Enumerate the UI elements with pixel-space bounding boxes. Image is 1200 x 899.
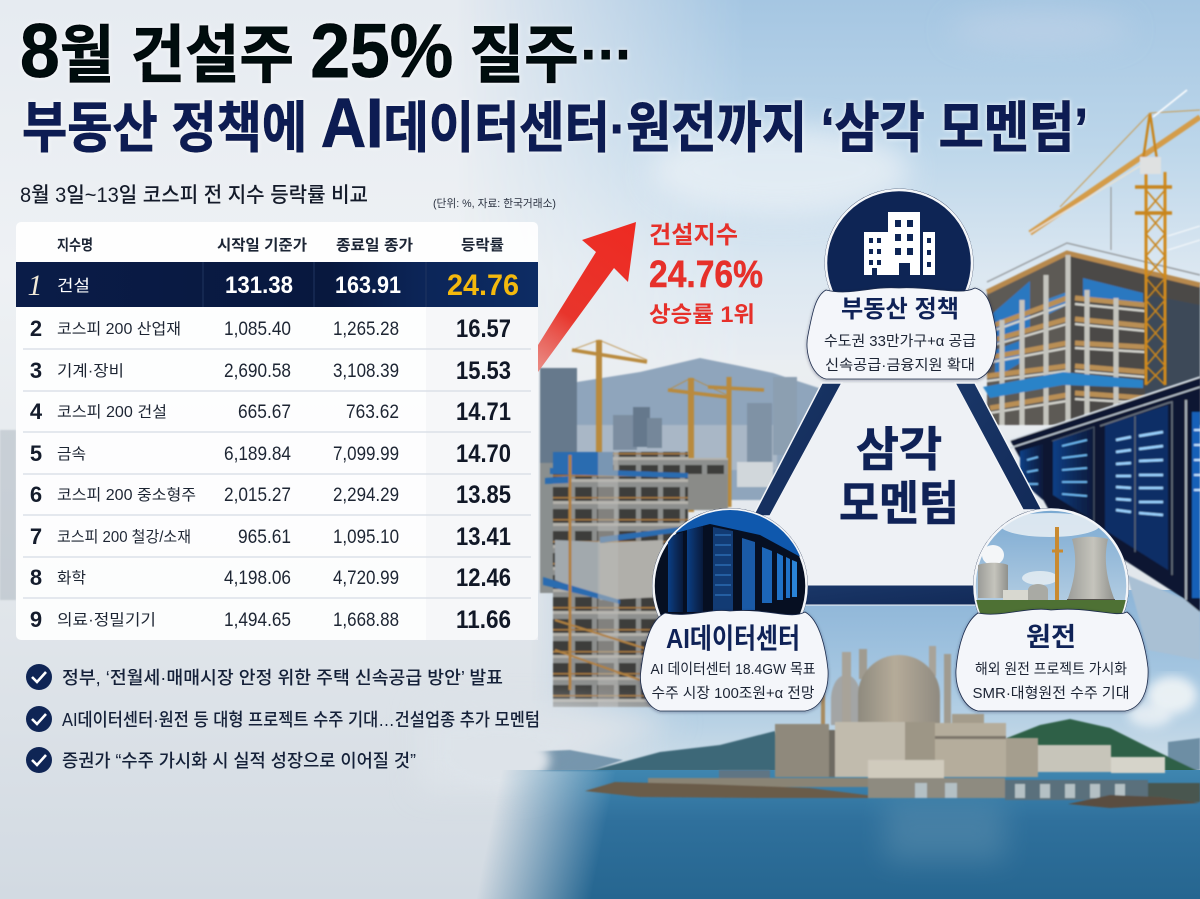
callout: construction index: 건설지수 [649,222,738,249]
floor slabs [987,304,1145,413]
table header: 등락률 [461,237,504,254]
row 3: 15.53 [456,357,511,385]
table header: 시작일 기준가 [217,237,307,254]
row 8: 화학 [57,569,86,587]
row 9 [30,606,511,634]
row 3: 3 [30,358,42,383]
rack 4 [1192,412,1200,598]
row 2: 1,265.28 [333,318,399,340]
row 1 highlighted: 건설: 건설 [57,277,90,295]
row 1 highlighted: 건설 [16,262,538,307]
row 2: 코스피 200 산업재 [57,320,181,338]
arrow: rising red [538,222,636,372]
row 8: 4,720.99 [333,567,399,589]
row 8: 12.46 [456,564,511,592]
row 6: 2,015.27 [224,484,291,506]
triangle label: 모멘텀 [839,477,959,530]
row 6: 코스피 200 중소형주 [57,486,196,504]
triangle: momentum [753,383,1042,605]
row 3: 3,108.39 [333,360,399,382]
row separators [23,349,531,598]
row 8 [30,564,511,592]
label card: AI데이터센터 [666,623,800,654]
roof railing [987,253,1200,292]
label card: SMR·대형원전 수주 기대 [972,685,1130,702]
row 8: 4,198.06 [224,567,291,589]
row 4 [30,398,511,426]
callout: construction index: 상승률 1위 [649,302,755,327]
callout: construction index: 24.76% [649,254,763,296]
row 4: 665.67 [238,401,291,423]
label card: 해외 원전 프로젝트 가시화 [975,661,1127,678]
label card [640,610,828,711]
tower cranes mid [572,340,764,512]
table subtitle: 8월 3일~13일 코스피 전 지수 등락률 비교 [20,184,368,207]
bullet 3 [26,747,416,773]
unit note: (단위: %, 자료: 한국거래소) [433,197,556,210]
label card: 부동산 정책 [841,296,959,323]
node: real-estate policy [807,188,997,379]
table header: 종료일 종가 [336,237,413,254]
tarps upper [993,281,1030,345]
water [440,770,1200,899]
label card: 신속공급·금융지원 확대 [825,357,975,374]
distant mountains and skyline [0,358,840,600]
LED strips [1116,432,1163,515]
big tower crane [1030,90,1200,385]
construction building left [543,452,728,707]
row 5: 6,189.84 [224,443,291,465]
title [20,7,1088,162]
triangle label: 삼각 [856,423,942,476]
row 5: 14.70 [456,440,511,468]
node: AI data center [640,508,828,711]
bullet 2: AI데이터센터·원전 등 대형 프로젝트 수주 기대…건설업종 추가 모멘텀 [62,710,540,730]
title line 1: … [579,7,633,72]
bullet 3: 증권가 “수주 가시화 시 실적 성장으로 이어질 것” [62,751,416,771]
row 6: 6 [30,482,42,507]
panel: index table [16,222,538,640]
bullet list [26,664,540,773]
nuclear plant [585,646,1200,808]
row 1 highlighted: 건설: 131.38 [225,272,293,299]
row 2 [30,315,511,343]
row 7: 965.61 [238,526,291,548]
row 3 [30,357,511,385]
row 1 highlighted: 건설: 24.76 [447,269,519,302]
server racks right [1010,377,1200,660]
rack 1 [1020,444,1043,500]
tarp lower [983,372,1143,398]
title line 1: 8월 건설주 25% 질주 [20,9,587,94]
icon: server racks [652,508,808,664]
label card: 원전 [1026,622,1076,652]
row 1 highlighted: 건설: 1 [28,269,42,302]
row 5: 5 [30,441,42,466]
row 2: 2 [30,316,42,341]
row 2: 16.57 [456,315,511,343]
icon: city buildings [824,188,974,338]
row 2: 1,085.40 [224,318,291,340]
haze fading building into left panel [420,705,680,790]
bullet 1: 정부, ‘전월세·매매시장 안정 위한 주택 신속공급 방안’ 발표 [62,668,503,688]
construction building right [983,243,1200,425]
node: nuclear power [956,508,1148,711]
row 9: 1,494.65 [224,609,291,631]
row 3: 2,690.58 [224,360,291,382]
label card: 수주 시장 100조원+α 전망 [652,685,814,702]
title line 2: 부동산 정책에 AI데이터센터·원전까지 ‘삼각 모멘텀’ [22,84,1088,162]
icon: cooling towers [970,508,1130,664]
row 9: 11.66 [456,606,511,634]
columns [1002,255,1116,425]
row 7: 코스피 200 철강/소재 [57,528,191,546]
coastal mountains [520,676,1200,772]
row 6: 13.85 [456,481,511,509]
row 5: 7,099.99 [333,443,399,465]
row 7: 1,095.10 [333,526,399,548]
rack 3 [1105,405,1168,570]
label card [807,288,997,379]
row 9: 9 [30,607,42,632]
row 9: 1,668.88 [333,609,399,631]
row 9: 의료·정밀기기 [57,611,156,629]
triangle label [839,423,959,530]
bullet 2 [26,706,540,732]
callout: construction index [649,222,763,327]
row 4: 14.71 [456,398,511,426]
row 5 [30,440,511,468]
row 1 highlighted: 건설: 163.91 [335,272,401,299]
row 8: 8 [30,565,42,590]
water reflection [885,802,1005,862]
row 7: 13.41 [456,523,511,551]
row 5: 금속 [57,445,86,463]
row 4: 763.62 [346,401,399,423]
row 6 [30,481,511,509]
row 7: 7 [30,524,42,549]
row 4: 코스피 200 건설 [57,403,167,421]
table header [57,237,504,254]
table header: 지수명 [57,237,93,254]
floor railings [987,298,1145,408]
label card: 수도권 33만가구+α 공급 [824,333,976,350]
label card [956,609,1148,711]
row 7 [30,523,511,551]
label card: AI 데이터센터 18.4GW 목표 [650,661,816,678]
rack 2 [1053,428,1093,520]
row 3: 기계·장비 [57,362,124,380]
row 6: 2,294.29 [333,484,399,506]
row 4: 4 [30,399,43,424]
haze over far mountains [450,732,550,788]
